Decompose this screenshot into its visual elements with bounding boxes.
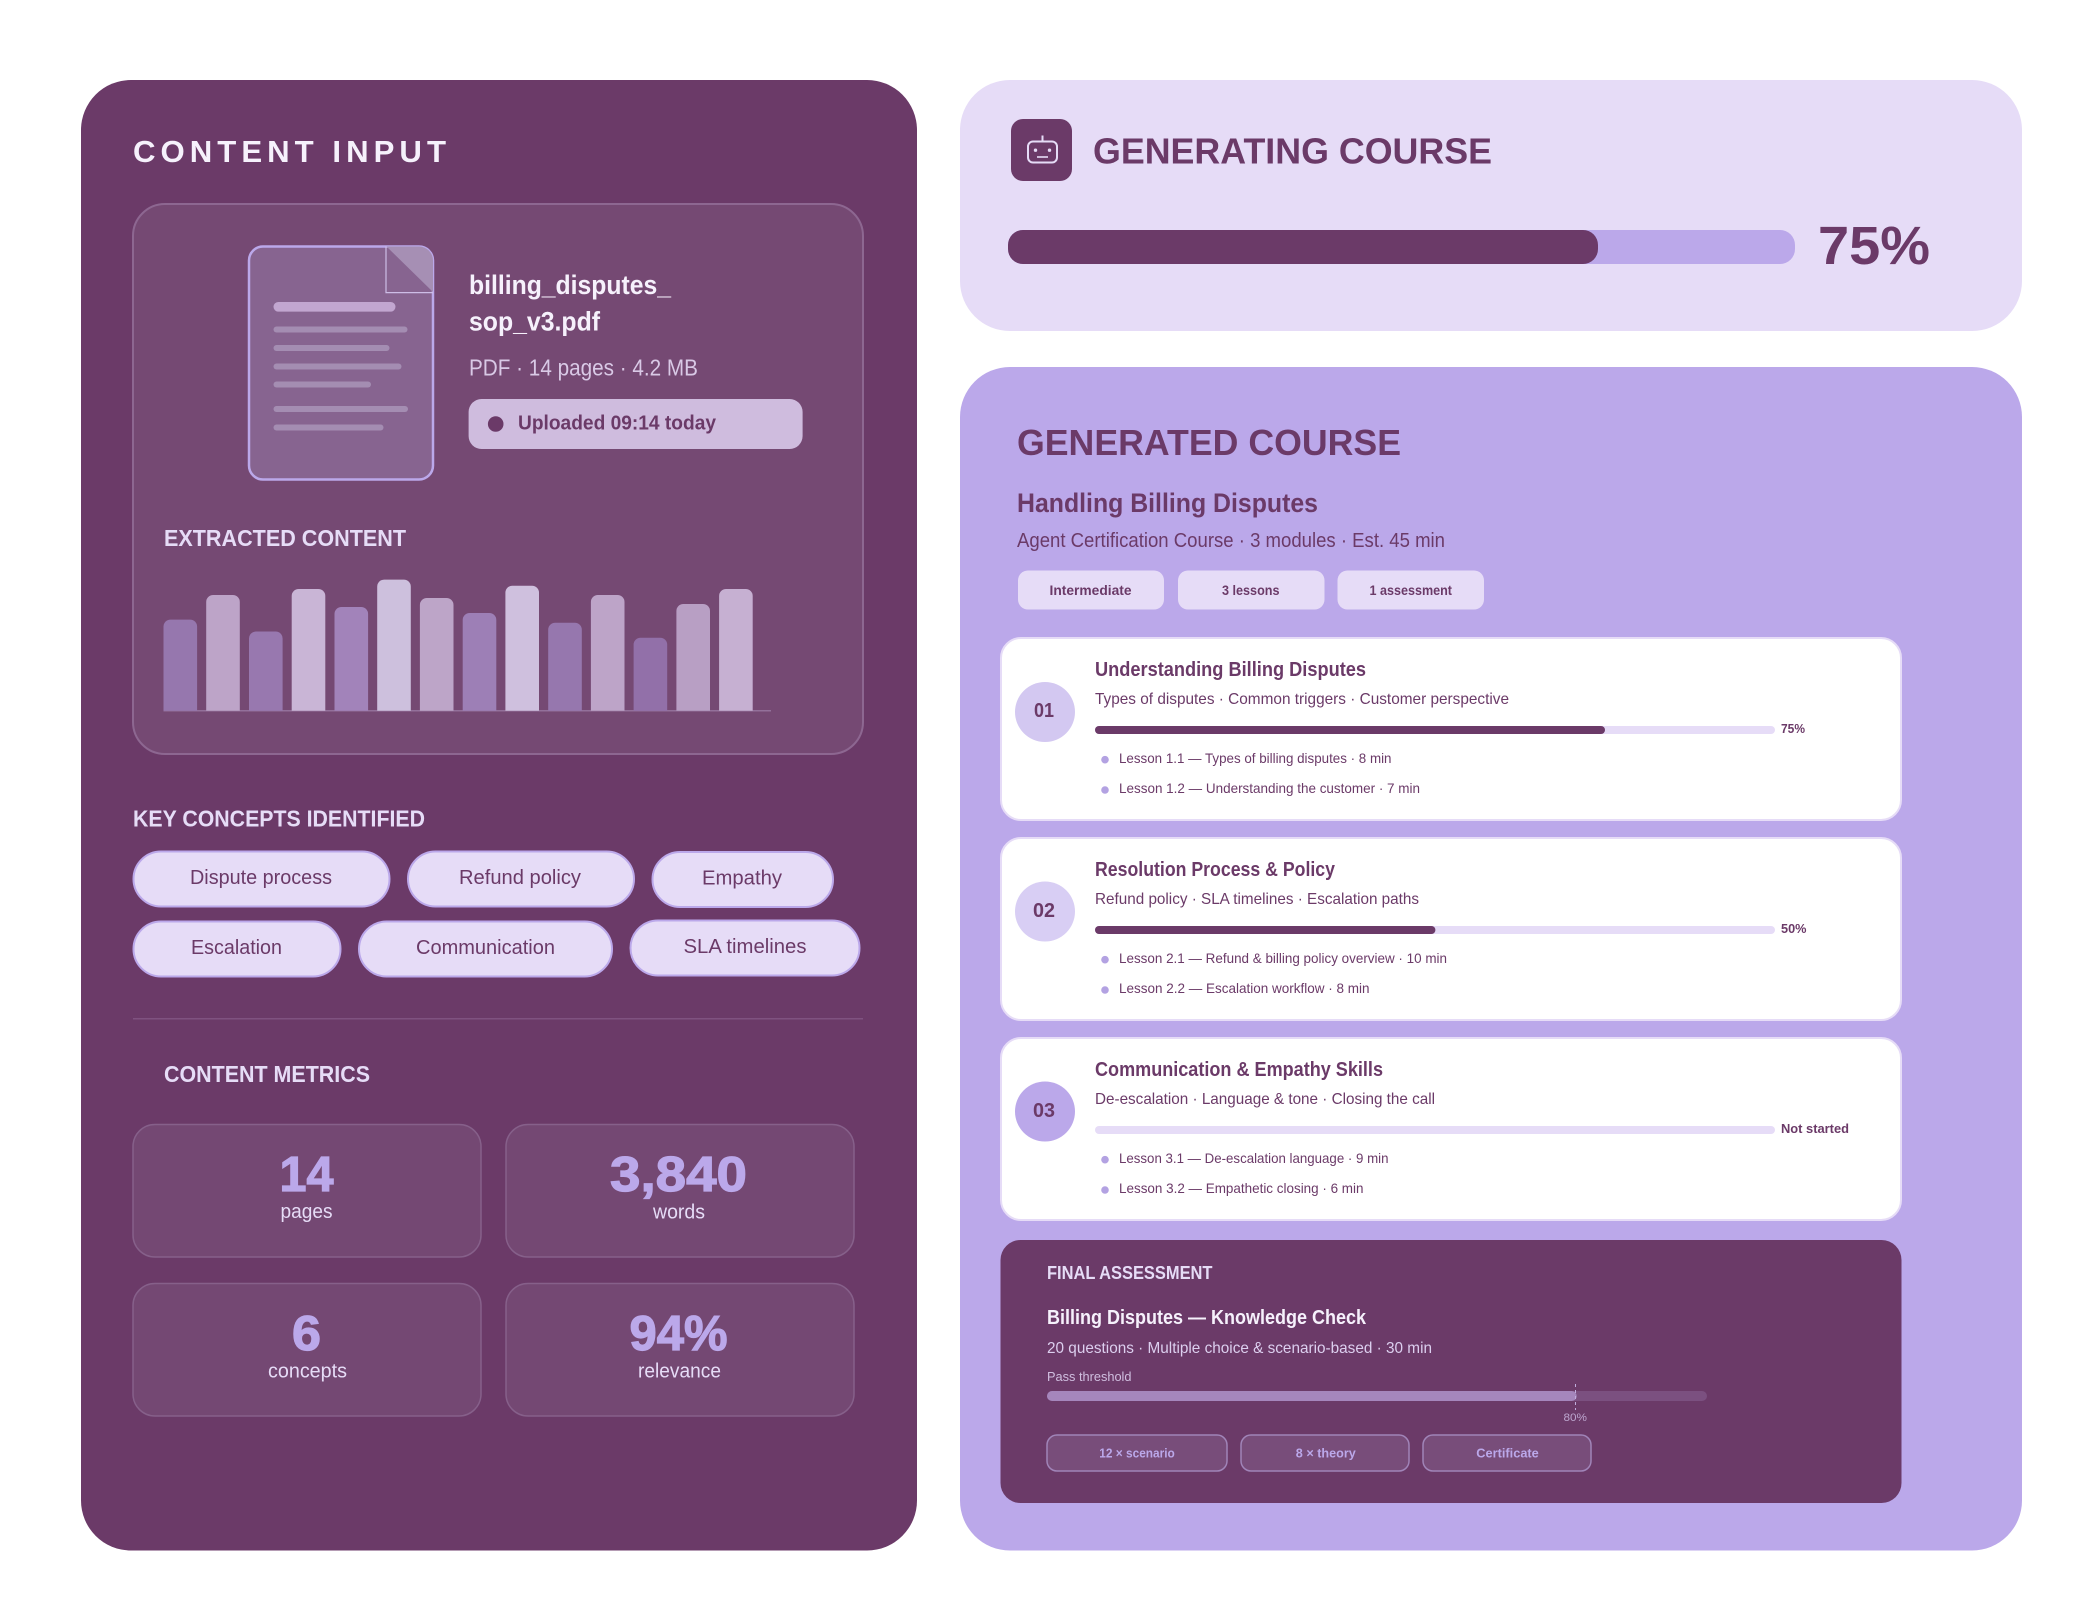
- assessment tags: 8 × theory: [1296, 1446, 1356, 1460]
- upload status badge: [469, 399, 803, 449]
- icon: robot: [1011, 119, 1072, 181]
- assessment tags: [1047, 1435, 1591, 1471]
- module number 01: [1015, 682, 1075, 742]
- metric: words: [506, 1124, 854, 1257]
- panel: uploaded file card: [133, 204, 863, 754]
- panel: content input: [81, 80, 917, 1550]
- module progress: [1095, 922, 1806, 936]
- metric: concepts: [133, 1284, 481, 1416]
- metric: relevance: relevance: [638, 1360, 721, 1382]
- course tags: 1 assessment: [1370, 582, 1452, 598]
- metric: relevance: [506, 1284, 854, 1416]
- metric: concepts: concepts: [268, 1360, 347, 1382]
- course tags: Intermediate: [1050, 582, 1132, 598]
- assessment label: FINAL ASSESSMENT: [1047, 1263, 1212, 1283]
- module progress: [1095, 722, 1805, 736]
- icon: pdf document: [249, 246, 434, 480]
- module number 03: [1015, 1082, 1075, 1142]
- progress value: 75%: [1818, 216, 1930, 276]
- lesson list: Lesson 1.1 — Types of billing disputes · 8 min: [1119, 750, 1392, 766]
- module progress: Not started: [1781, 1122, 1849, 1136]
- module title: Communication & Empathy Skills: [1095, 1059, 1383, 1081]
- module number 02: [1015, 882, 1075, 942]
- panel: final assessment: [1000, 1240, 1902, 1503]
- course subtitle: Agent Certification Course · 3 modules · Est. 45 min: [1017, 529, 1445, 552]
- concept pills: Communication: [416, 936, 555, 959]
- course tags: [1018, 570, 1484, 610]
- assessment tags: Certificate: [1476, 1446, 1539, 1460]
- metric: words: 3,840: [610, 1148, 747, 1202]
- file details: PDF · 14 pages · 4.2 MB: [469, 354, 698, 380]
- concept pills: [134, 852, 860, 976]
- metric: relevance: 94%: [630, 1307, 728, 1361]
- pass threshold label: Pass threshold: [1047, 1369, 1132, 1384]
- module title: Resolution Process & Policy: [1095, 859, 1336, 881]
- file name: billing_disputes_: [469, 270, 672, 300]
- lesson list: [1101, 750, 1420, 796]
- concept pills: SLA timelines: [684, 935, 806, 958]
- lesson list: Lesson 2.1 — Refund & billing policy overview · 10 min: [1119, 950, 1447, 966]
- concept pills: Dispute process: [190, 866, 332, 889]
- pass threshold bar: [1047, 1384, 1707, 1424]
- module number 01: 01: [1034, 700, 1054, 722]
- lesson list: Lesson 3.2 — Empathetic closing · 6 min: [1119, 1180, 1364, 1196]
- course title: Handling Billing Disputes: [1017, 488, 1318, 518]
- lesson list: Lesson 2.2 — Escalation workflow · 8 min: [1119, 980, 1370, 996]
- lesson list: Lesson 1.2 — Understanding the customer · 7 min: [1119, 780, 1420, 796]
- concept pills: Empathy: [702, 866, 783, 890]
- heading: content metrics: CONTENT METRICS: [164, 1061, 370, 1087]
- pass threshold bar: 80%: [1564, 1412, 1587, 1424]
- module progress: 75%: [1781, 722, 1805, 736]
- assessment title: Billing Disputes — Knowledge Check: [1047, 1307, 1367, 1329]
- module title: Understanding Billing Disputes: [1095, 659, 1366, 681]
- lesson list: [1101, 1150, 1388, 1196]
- heading: key concepts identified: KEY CONCEPTS IDENTIFIED: [133, 806, 425, 832]
- upload status badge: Uploaded 09:14 today: [518, 412, 717, 434]
- assessment tags: 12 × scenario: [1099, 1446, 1175, 1460]
- heading: extracted content: EXTRACTED CONTENT: [164, 525, 406, 551]
- module number 02: 02: [1033, 900, 1055, 922]
- progress bar: 75 percent: [1008, 230, 1795, 264]
- file name: [469, 270, 672, 336]
- heading: generating course: GENERATING COURSE: [1093, 130, 1492, 172]
- metric: words: words: [652, 1202, 705, 1224]
- module topics: Refund policy · SLA timelines · Escalation paths: [1095, 891, 1419, 908]
- module card 03: [1001, 1038, 1901, 1220]
- lesson list: Lesson 3.1 — De-escalation language · 9 min: [1119, 1150, 1388, 1166]
- heading: content input: CONTENT INPUT: [133, 134, 451, 169]
- module card 01: [1001, 638, 1901, 820]
- module progress: [1095, 1122, 1849, 1136]
- panel: generating course: [960, 80, 2022, 331]
- course tags: 3 lessons: [1222, 582, 1280, 598]
- module progress: 50%: [1781, 922, 1806, 936]
- concept pills: Refund policy: [459, 866, 582, 889]
- module topics: Types of disputes · Common triggers · Customer perspective: [1095, 691, 1509, 708]
- metric: pages: 14: [280, 1148, 334, 1202]
- metric: pages: pages: [280, 1201, 332, 1223]
- module topics: De-escalation · Language & tone · Closing the call: [1095, 1091, 1435, 1108]
- heading: generated course: GENERATED COURSE: [1017, 422, 1401, 463]
- panel: generated course: [960, 367, 2022, 1550]
- file name: sop_v3.pdf: [469, 306, 601, 336]
- module card 02: [1001, 838, 1901, 1020]
- metric: concepts: 6: [292, 1307, 321, 1361]
- bar chart: extracted content: [164, 580, 771, 711]
- metric: pages: [133, 1124, 481, 1257]
- lesson list: [1101, 950, 1447, 996]
- module number 03: 03: [1033, 1100, 1055, 1122]
- assessment details: 20 questions · Multiple choice & scenario-based · 30 min: [1047, 1340, 1432, 1357]
- concept pills: Escalation: [191, 936, 282, 959]
